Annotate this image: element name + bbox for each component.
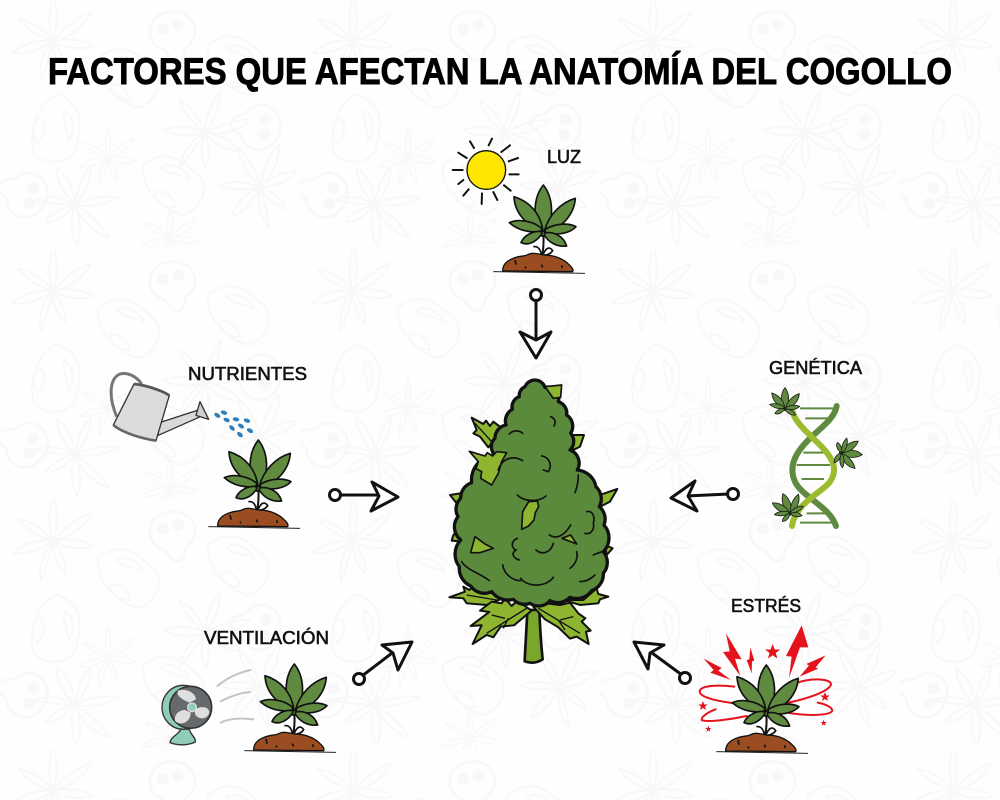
arrow: luz [520,290,551,358]
bud leaves [449,418,617,644]
factor: ventilación [162,627,336,752]
icon: plant [493,185,585,273]
label: luz: LUZ [547,147,581,167]
factor: nutrientes [111,364,307,528]
label: nutrientes: NUTRIENTES [188,364,307,384]
arrow: ventilación [354,642,412,684]
icon: plant [208,440,300,528]
label: genética: GENÉTICA [769,358,862,378]
factor: luz [453,139,585,273]
arrow: nutrientes [330,482,398,511]
icon: plant [244,664,336,752]
arrow: genética [671,481,738,511]
icon: sun [453,139,519,204]
central cannabis bud [449,380,617,663]
label: estrés: ESTRÉS [731,596,801,616]
factor: genética [769,358,864,526]
icon: water drops [213,410,254,438]
factor: estrés [698,596,832,753]
icon: wind lines [217,670,253,723]
bud body [454,380,609,606]
bud inner leaves [469,385,577,553]
icon: plant [716,665,808,753]
bud contour lines [462,417,606,585]
icon: fan [162,685,212,745]
arrow: estrés [634,642,690,684]
icon: watering can [111,374,209,441]
icon: red lightning and stars [698,625,832,732]
bud leaf veins [467,423,580,633]
label: ventilación: VENTILACIÓN [204,627,329,648]
icon: dna helix [769,388,864,526]
bud stem [525,610,543,663]
